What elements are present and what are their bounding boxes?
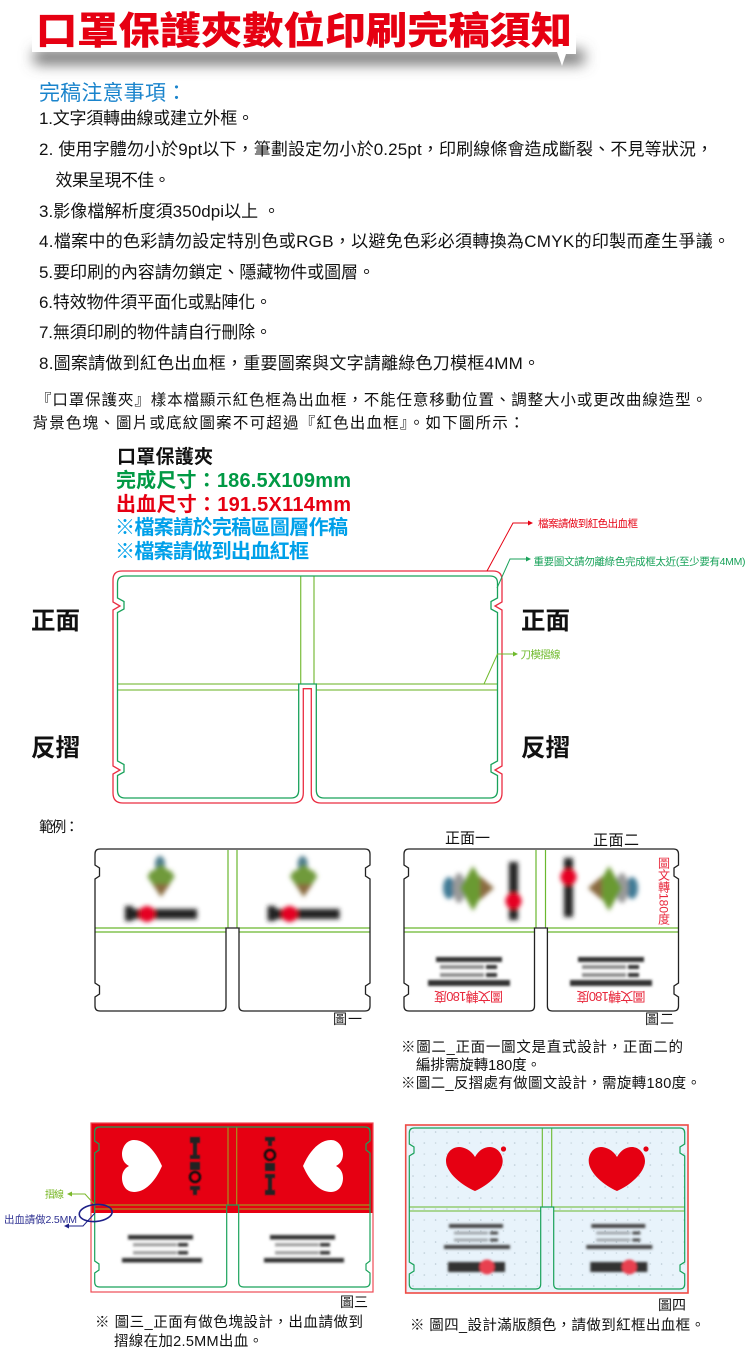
callout: bleed frame: 檔案請做到紅色出血框 [538, 517, 638, 530]
size specification [115, 446, 351, 563]
notes list: 5.要印刷的內容請勿鎖定、隱藏物件或圖層。 [39, 263, 375, 282]
figure 4 [406, 1125, 688, 1293]
callout: fold line [45, 1188, 95, 1205]
notes list [39, 109, 730, 373]
intro paragraph: 背景色塊、圖片或底紋圖案不可超過『紅色出血框』。如下圖所示： [32, 414, 524, 432]
section heading: 完稿注意事項： [39, 82, 187, 105]
side labels: 反摺 [31, 734, 80, 762]
intro paragraph [32, 390, 707, 432]
figure 1 label: 圖一 [333, 1011, 362, 1027]
side labels: 反摺 [521, 734, 570, 762]
bleed frame [406, 1125, 688, 1293]
callout: keep clear of trim frame [497, 555, 746, 588]
fold lines [118, 576, 498, 690]
figure 2 headings: 正面二 [593, 832, 639, 849]
blurred text and logos [444, 1224, 652, 1274]
die outline [404, 849, 678, 1011]
title banner: 口罩保護夾數位印刷完稿須知 [36, 10, 572, 53]
notes list: 效果呈現不佳。 [56, 171, 170, 190]
intro paragraph: 『口罩保護夾』樣本檔顯示紅色框為出血框，不能任意移動位置、調整大小或更改曲線造型。 [36, 390, 707, 409]
side labels [31, 608, 570, 762]
callout: 2.5mm bleed: 出血請做2.5MM [4, 1213, 77, 1226]
notes list: 8.圖案請做到紅色出血框，重要圖案與文字請離綠色刀模框4MM。 [39, 354, 540, 373]
trim outline [95, 1127, 370, 1287]
figure 2 notes [401, 1039, 701, 1092]
blurred logo right [268, 856, 340, 922]
callout: fold line: 刀模摺線 [520, 648, 561, 661]
red colour block [91, 1123, 373, 1213]
red hearts [446, 1147, 503, 1191]
size specification: 出血尺寸：191.5X114mm [116, 493, 351, 516]
figure 2 notes: ※圖二_反摺處有做圖文設計，需旋轉180度。 [401, 1075, 701, 1092]
notes list: 2. 使用字體勿小於9pt以下，筆劃設定勿小於0.25pt，印刷線條會造成斷裂、不見等狀況， [39, 139, 713, 159]
fold lines [95, 1127, 370, 1209]
dot pattern [406, 1125, 688, 1293]
blurred rotated logos [443, 858, 638, 920]
callout: 2.5mm bleed [4, 1203, 113, 1228]
examples heading: 範例： [39, 818, 79, 836]
fold lines [404, 850, 678, 932]
figure 2: 圖文轉180度 [656, 857, 670, 925]
title banner [32, 8, 584, 66]
side labels: 正面 [521, 608, 570, 635]
figure 3 note: 摺線在加2.5MM出血。 [114, 1333, 263, 1350]
figure 3 note: ※ 圖三_正面有做色塊設計，出血請做到 [95, 1314, 363, 1331]
blurred text blocks [122, 1235, 344, 1262]
notes list: 1.文字須轉曲線或建立外框。 [39, 109, 254, 128]
figure 2 label: 圖二 [645, 1011, 674, 1027]
bleed outline [113, 571, 502, 803]
figure 2 notes: 編排需旋轉180度。 [416, 1057, 541, 1074]
notes list: 6.特效物件須平面化或點陣化。 [39, 293, 272, 312]
size specification: ※檔案請於完稿區圖層作稿 [115, 515, 348, 539]
figure 2 headings [445, 830, 639, 849]
bleed frame [91, 1123, 373, 1292]
figure 4 note: ※ 圖四_設計滿版顏色，請做到紅框出血框。 [410, 1316, 705, 1334]
figure 1 [95, 849, 370, 1011]
callout: fold line: 摺線 [45, 1188, 64, 1201]
trim outline [118, 576, 498, 798]
figure 2 headings: 正面一 [445, 830, 490, 847]
figure 2 [404, 849, 678, 1011]
fold lines [409, 1128, 685, 1211]
side labels: 正面 [31, 608, 80, 635]
notes list: 3.影像檔解析度須350dpi以上 。 [39, 202, 280, 221]
size specification: 口罩保護夾 [117, 446, 213, 468]
size specification: 完成尺寸：186.5X109mm [116, 468, 351, 492]
notes list: 7.無須印刷的物件請自行刪除。 [39, 323, 272, 342]
fold lines [95, 850, 370, 932]
main die-line diagram [113, 571, 502, 803]
blurred vertical logos [190, 1137, 275, 1195]
figure 3 label: 圖三 [340, 1294, 368, 1310]
notes list: 4.檔案中的色彩請勿設定特別色或RGB，以避免色彩必須轉換為CMYK的印製而產生爭議。 [39, 232, 730, 251]
rotated red text: 圖文轉180度 [434, 989, 503, 1004]
callout: keep clear of trim frame: 重要圖文請勿離綠色完成框太近(至少要有4MM) [534, 555, 746, 568]
die outline [95, 849, 370, 1011]
figure 2: 圖文轉180度 [576, 989, 646, 1004]
white hearts [122, 1140, 162, 1192]
figure 4 label: 圖四 [658, 1297, 686, 1313]
figure 2 notes: ※圖二_正面一圖文是直式設計，正面二的 [401, 1039, 683, 1056]
callout: fold line [484, 648, 561, 684]
blurred text blocks [428, 957, 652, 986]
full-bleed background [406, 1125, 688, 1293]
trim outline [409, 1128, 685, 1289]
figure 3 [91, 1123, 373, 1292]
blurred logo left [125, 856, 197, 922]
size specification: ※檔案請做到出血紅框 [115, 539, 309, 563]
callout: bleed frame [487, 517, 638, 571]
figure 3 note [95, 1314, 363, 1350]
